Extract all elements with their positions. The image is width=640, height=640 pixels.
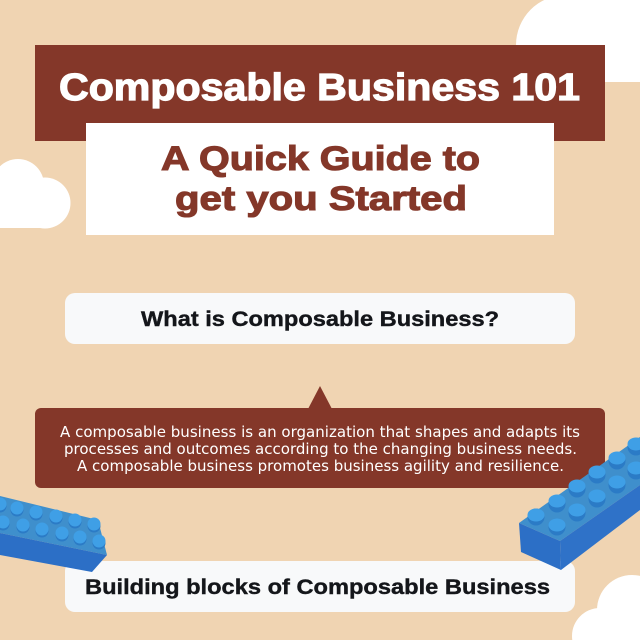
- heading panel: building blocks: [65, 561, 575, 612]
- definition line 3: A composable business promotes business agility and resilience.: [77, 457, 564, 475]
- subtitle line 2: get you Started: [175, 180, 467, 218]
- cloud: bottom right: [572, 575, 640, 640]
- icon: left lego brick: [0, 496, 107, 572]
- subtitle line 1: A Quick Guide to: [161, 140, 480, 178]
- title text: Composable Business 101: [59, 67, 580, 109]
- definition callout: [35, 386, 605, 488]
- icon: right lego brick: [519, 437, 640, 570]
- subtitle panel: [86, 123, 554, 235]
- title banner: [35, 45, 605, 141]
- definition line 2: processes and outcomes according to the changing business needs.: [64, 440, 577, 458]
- building blocks text: Building blocks of Composable Business: [85, 576, 550, 599]
- heading text: What is Composable Business?: [141, 308, 499, 331]
- cloud: top right: [516, 0, 640, 95]
- callout pointer: [308, 386, 332, 409]
- heading panel: what is composable business: [65, 293, 575, 344]
- definition line 1: A composable business is an organization that shapes and adapts its: [60, 423, 580, 441]
- cloud: left: [0, 159, 70, 228]
